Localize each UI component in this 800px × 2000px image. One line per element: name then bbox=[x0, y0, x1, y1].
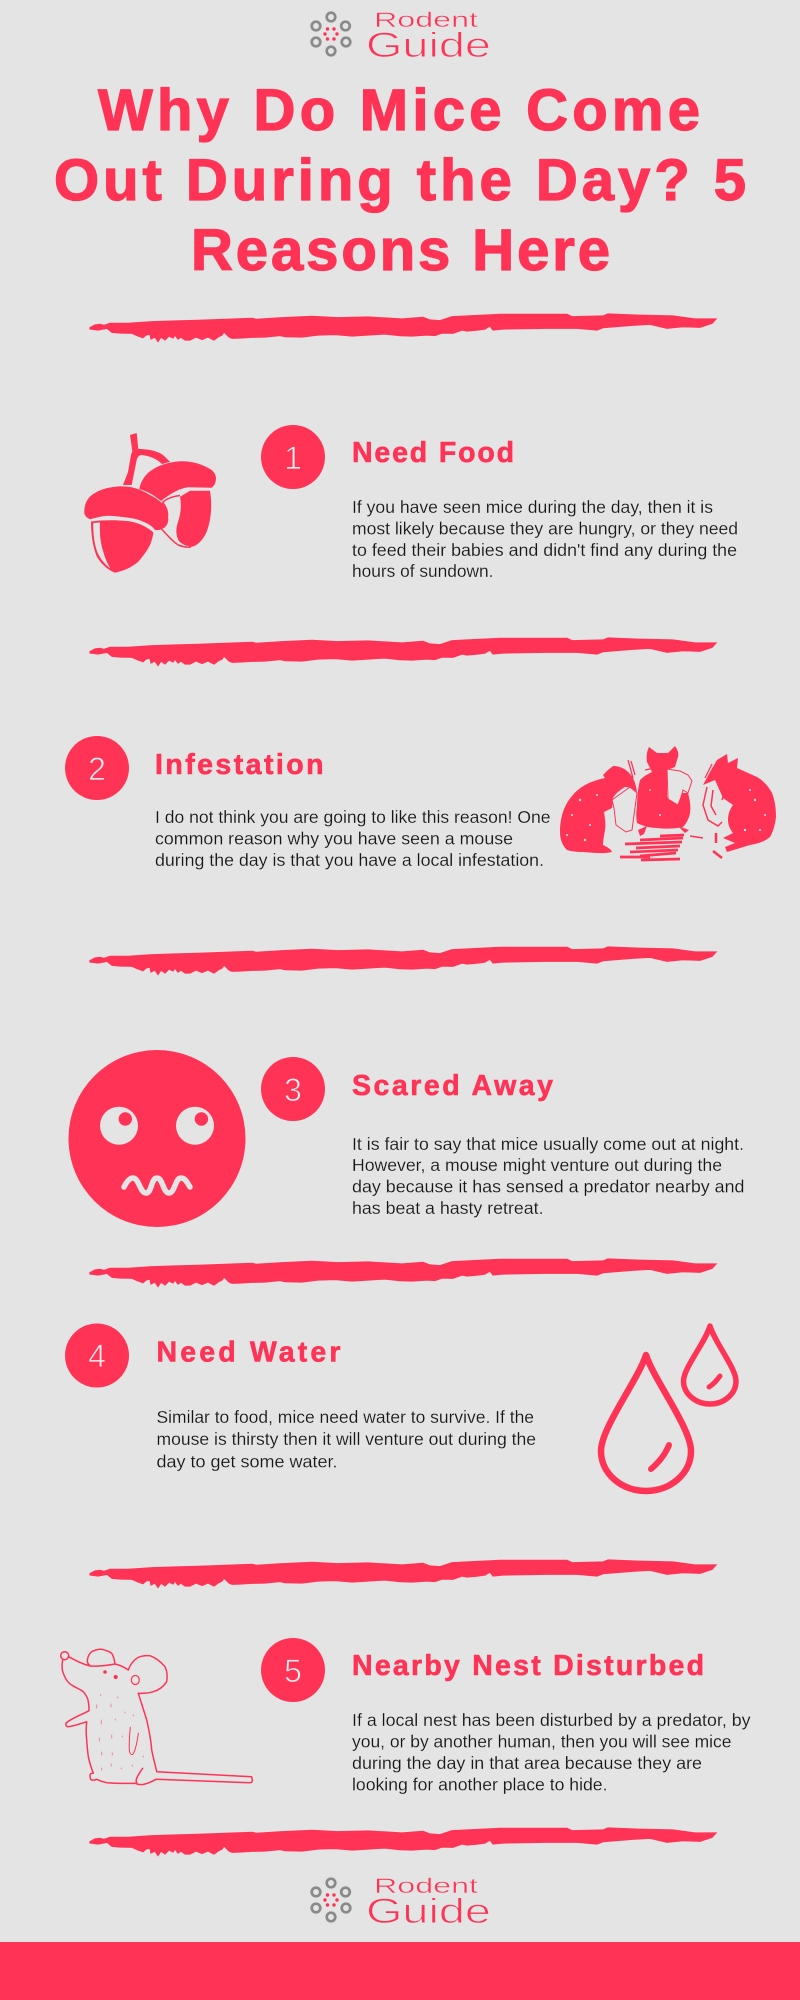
title: Reasons Here bbox=[191, 218, 610, 283]
icon: scared face bbox=[68, 1050, 246, 1227]
number badge 1 bbox=[261, 425, 325, 489]
heading: Need Water bbox=[156, 1337, 340, 1369]
number badge 3: 3 bbox=[284, 1072, 302, 1108]
number badge 1: 1 bbox=[284, 440, 302, 476]
body text bbox=[352, 497, 738, 581]
icon: outlined mouse bbox=[61, 1649, 252, 1785]
icon: water drops bbox=[601, 1326, 736, 1491]
heading: Scared Away bbox=[352, 1070, 553, 1102]
panel: reason 3 scared away bbox=[68, 1050, 744, 1227]
footer bar bbox=[0, 1942, 800, 2000]
body text: Similar to food, mice need water to survive. If the bbox=[156, 1407, 534, 1427]
title: Why Do Mice Come bbox=[98, 78, 700, 143]
logo: bottom bbox=[312, 1875, 491, 1931]
number badge 3 bbox=[261, 1057, 325, 1121]
body text: most likely because they are hungry, or they need bbox=[352, 518, 738, 538]
body text: common reason why you have seen a mouse bbox=[155, 828, 513, 848]
body text: It is fair to say that mice usually come out at night. bbox=[352, 1134, 744, 1154]
number badge 2: 2 bbox=[88, 751, 106, 787]
body text: during the day is that you have a local infestation. bbox=[155, 850, 544, 870]
number badge 4 bbox=[65, 1324, 129, 1388]
body text bbox=[156, 1407, 536, 1472]
body text: to feed their babies and didn't find any during the bbox=[352, 540, 737, 560]
body text bbox=[352, 1710, 751, 1795]
number badge 5: 5 bbox=[284, 1653, 302, 1689]
body text: day to get some water. bbox=[156, 1452, 338, 1472]
panel: reason 4 need water bbox=[65, 1324, 736, 1491]
body text: day because it has sensed a predator nearby and bbox=[352, 1177, 744, 1197]
heading: Nearby Nest Disturbed bbox=[352, 1650, 704, 1682]
body text bbox=[155, 807, 550, 870]
icon: acorns bbox=[84, 433, 216, 573]
body text: you, or by another human, then you will see mice bbox=[352, 1732, 732, 1752]
body text: If a local nest has been disturbed by a predator, by bbox=[352, 1710, 751, 1730]
panel: reason 1 need food bbox=[84, 425, 738, 581]
body text: hours of sundown. bbox=[352, 561, 494, 581]
heading: Need Food bbox=[352, 437, 514, 469]
body text: If you have seen mice during the day, then it is bbox=[352, 497, 713, 517]
logo: top bbox=[312, 9, 491, 65]
body text: looking for another place to hide. bbox=[352, 1775, 608, 1795]
body text: However, a mouse might venture out during the bbox=[352, 1155, 722, 1175]
number badge 2 bbox=[65, 736, 129, 800]
panel: reason 5 nearby nest disturbed bbox=[61, 1638, 751, 1795]
title bbox=[54, 78, 746, 283]
body text: I do not think you are going to like this reason! One bbox=[155, 807, 550, 827]
panel: reason 2 infestation bbox=[65, 736, 776, 870]
number badge 4: 4 bbox=[88, 1338, 106, 1374]
number badge 5 bbox=[261, 1638, 325, 1702]
body text: mouse is thirsty then it will venture out during the bbox=[156, 1429, 536, 1449]
body text bbox=[352, 1134, 744, 1218]
icon: three rats with handkerchiefs around a basket bbox=[560, 746, 776, 860]
title: Out During the Day? 5 bbox=[54, 148, 746, 213]
heading: Infestation bbox=[155, 749, 324, 781]
body text: has beat a hasty retreat. bbox=[352, 1198, 544, 1218]
body text: during the day in that area because they are bbox=[352, 1753, 702, 1773]
